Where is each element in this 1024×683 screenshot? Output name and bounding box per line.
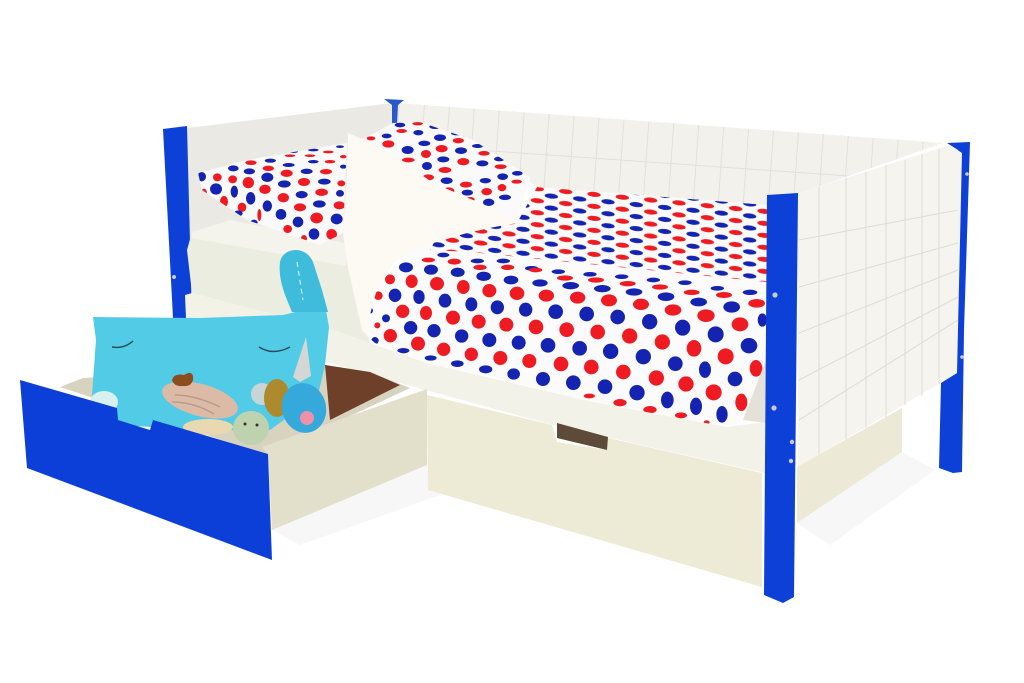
right quilted side panel (798, 145, 962, 467)
right drawer (427, 395, 762, 587)
open drawer interior and side (60, 365, 427, 530)
illustration: blue and white children's bed with drawers (20, 99, 970, 603)
left quilted panel (187, 103, 392, 245)
right back post (939, 142, 970, 473)
mattress (187, 220, 767, 423)
polka dot duvet (367, 187, 767, 427)
floor shadows (272, 452, 935, 545)
toys in drawer (158, 337, 332, 445)
bed frame rail (185, 293, 765, 473)
under-bed cabinet side (797, 408, 902, 523)
back left blue post (163, 126, 192, 318)
back quilted panel (397, 103, 943, 205)
small back corner post (384, 99, 404, 125)
polka dot pillow (197, 122, 530, 245)
toy: cyan pillow with sleeping eyes (90, 250, 329, 430)
front blue post (764, 193, 798, 603)
white folded duvet corner (343, 133, 517, 337)
right post screws (172, 172, 969, 359)
blue drawer front (20, 380, 272, 560)
